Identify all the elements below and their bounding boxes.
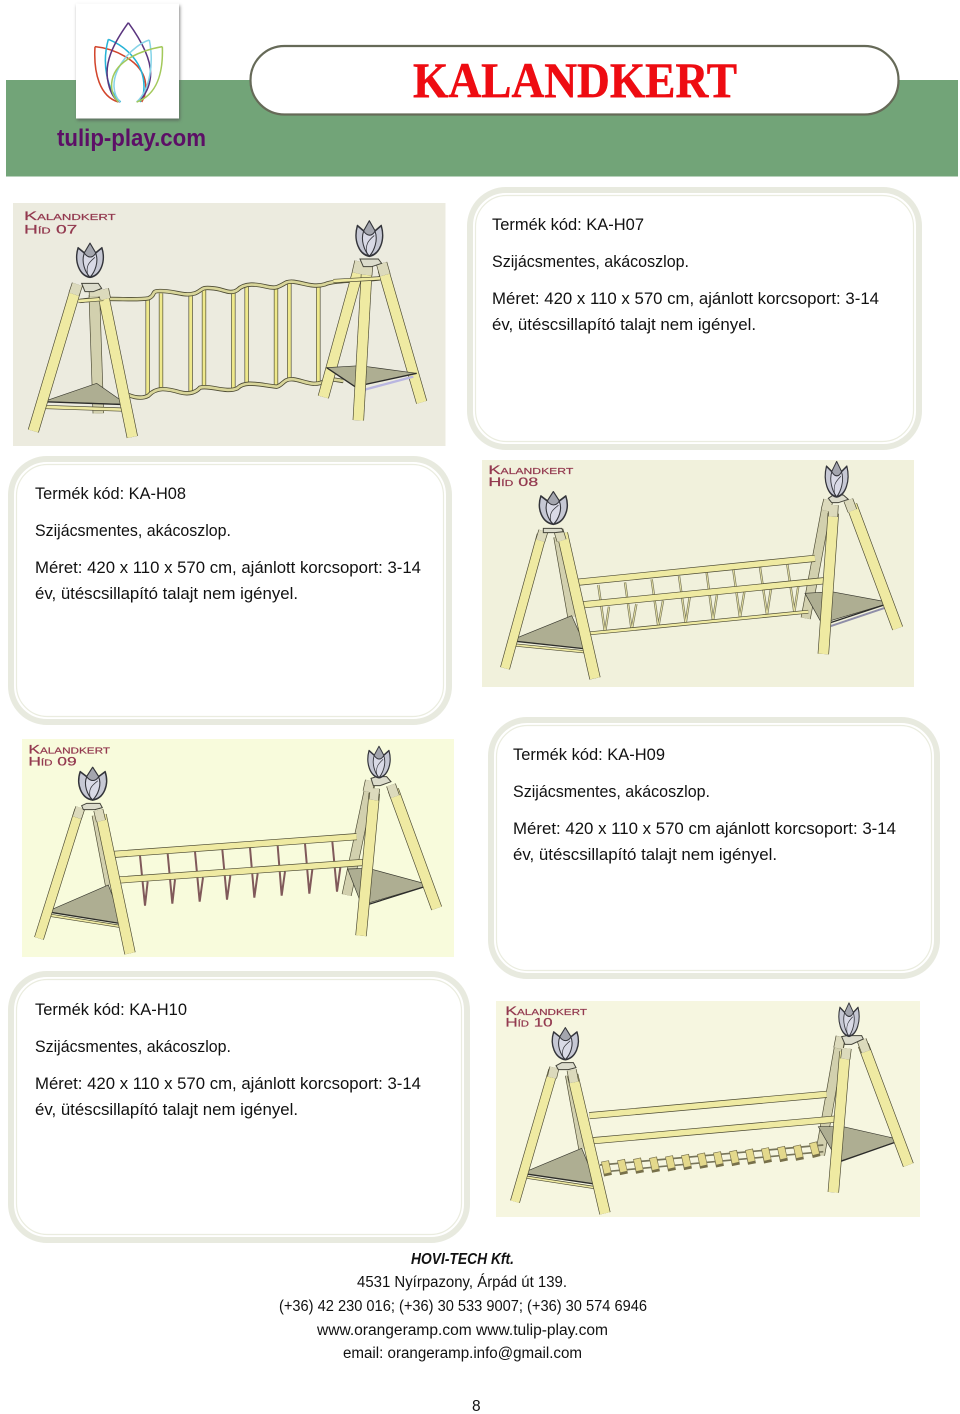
text block	[35, 1001, 421, 1119]
far tower legs and platforms	[510, 507, 891, 652]
text block: év, ütéscsillapító talajt nem igényel.	[492, 316, 756, 334]
text block: Termék kód: KA-H07	[492, 216, 644, 234]
header band	[6, 4, 958, 176]
image label	[24, 209, 116, 236]
panel: KA-H08 text	[11, 459, 449, 722]
text block: Szijácsmentes, akácoszlop.	[513, 783, 710, 801]
far tower legs and platforms	[522, 1042, 902, 1188]
image label: Kalandkert	[488, 463, 573, 477]
text block: év, ütéscsillapító talajt nem igényel.	[35, 1101, 298, 1119]
panel: KA-H09 image	[22, 739, 454, 957]
image label	[28, 743, 110, 769]
logo card	[57, 4, 206, 152]
text block: év, ütéscsillapító talajt nem igényel.	[513, 846, 777, 864]
footer contact block: HOVI-TECH Kft.	[411, 1251, 514, 1268]
panel: KA-H09 text	[491, 720, 937, 976]
footer contact block: 4531 Nyírpazony, Árpád út 139.	[357, 1274, 567, 1291]
text block: év, ütéscsillapító talajt nem igényel.	[35, 585, 298, 603]
panel: KA-H10 text	[11, 974, 467, 1240]
near tower legs and tulips	[39, 747, 437, 953]
footer contact block: www.orangeramp.com www.tulip-play.com	[316, 1322, 608, 1339]
panel: KA-H07 image	[13, 203, 446, 446]
title pill	[250, 46, 898, 114]
panel: KA-H07 text	[470, 190, 919, 447]
text block: Szijácsmentes, akácoszlop.	[35, 1038, 231, 1056]
logo text: tulip-play.com	[57, 125, 206, 152]
bridge rails and pickets	[114, 837, 365, 906]
image label	[488, 463, 573, 489]
footer contact block: email: orangeramp.info@gmail.com	[343, 1345, 582, 1362]
panel: KA-H10 image	[496, 1001, 920, 1217]
left tower	[33, 243, 132, 437]
image label: Híd 09	[28, 755, 77, 769]
image label: Kalandkert	[28, 743, 110, 757]
far tower legs and platforms	[47, 785, 430, 927]
text block: Termék kód: KA-H10	[35, 1001, 187, 1019]
title: KALANDKERT	[413, 52, 737, 108]
image label: Kalandkert	[24, 209, 116, 223]
bridge rails and slats	[577, 558, 825, 633]
right tower	[323, 221, 422, 420]
panel: KA-H08 image	[482, 460, 914, 687]
near tower legs and tulips	[505, 462, 898, 678]
rope bridge	[80, 278, 380, 398]
text block: Szijácsmentes, akácoszlop.	[492, 253, 689, 271]
text block	[492, 216, 879, 334]
image label: Kalandkert	[505, 1004, 587, 1018]
near tower legs and tulips	[515, 1003, 908, 1213]
text block: Méret: 420 x 110 x 570 cm ajánlott korcsoport: 3-14	[513, 820, 896, 838]
text block: Termék kód: KA-H08	[35, 485, 186, 503]
text block	[513, 746, 896, 864]
bridge rails and log ladder	[589, 1094, 837, 1176]
image label	[505, 1004, 587, 1029]
icon: tulip logo	[95, 23, 162, 102]
text block	[35, 485, 421, 603]
image label: Híd 07	[24, 222, 78, 236]
text block: Méret: 420 x 110 x 570 cm, ajánlott korcsoport: 3-14	[35, 1075, 421, 1093]
text block: Méret: 420 x 110 x 570 cm, ajánlott korcsoport: 3-14	[492, 290, 879, 308]
text block: Méret: 420 x 110 x 570 cm, ajánlott korcsoport: 3-14	[35, 559, 421, 577]
text block: Termék kód: KA-H09	[513, 746, 665, 764]
image label: Híd 08	[488, 475, 539, 489]
footer contact block	[279, 1251, 647, 1362]
footer contact block: (+36) 42 230 016; (+36) 30 533 9007; (+36) 30 574 6946	[279, 1298, 647, 1315]
image label: Híd 10	[505, 1015, 553, 1029]
text block: Szijácsmentes, akácoszlop.	[35, 522, 231, 540]
